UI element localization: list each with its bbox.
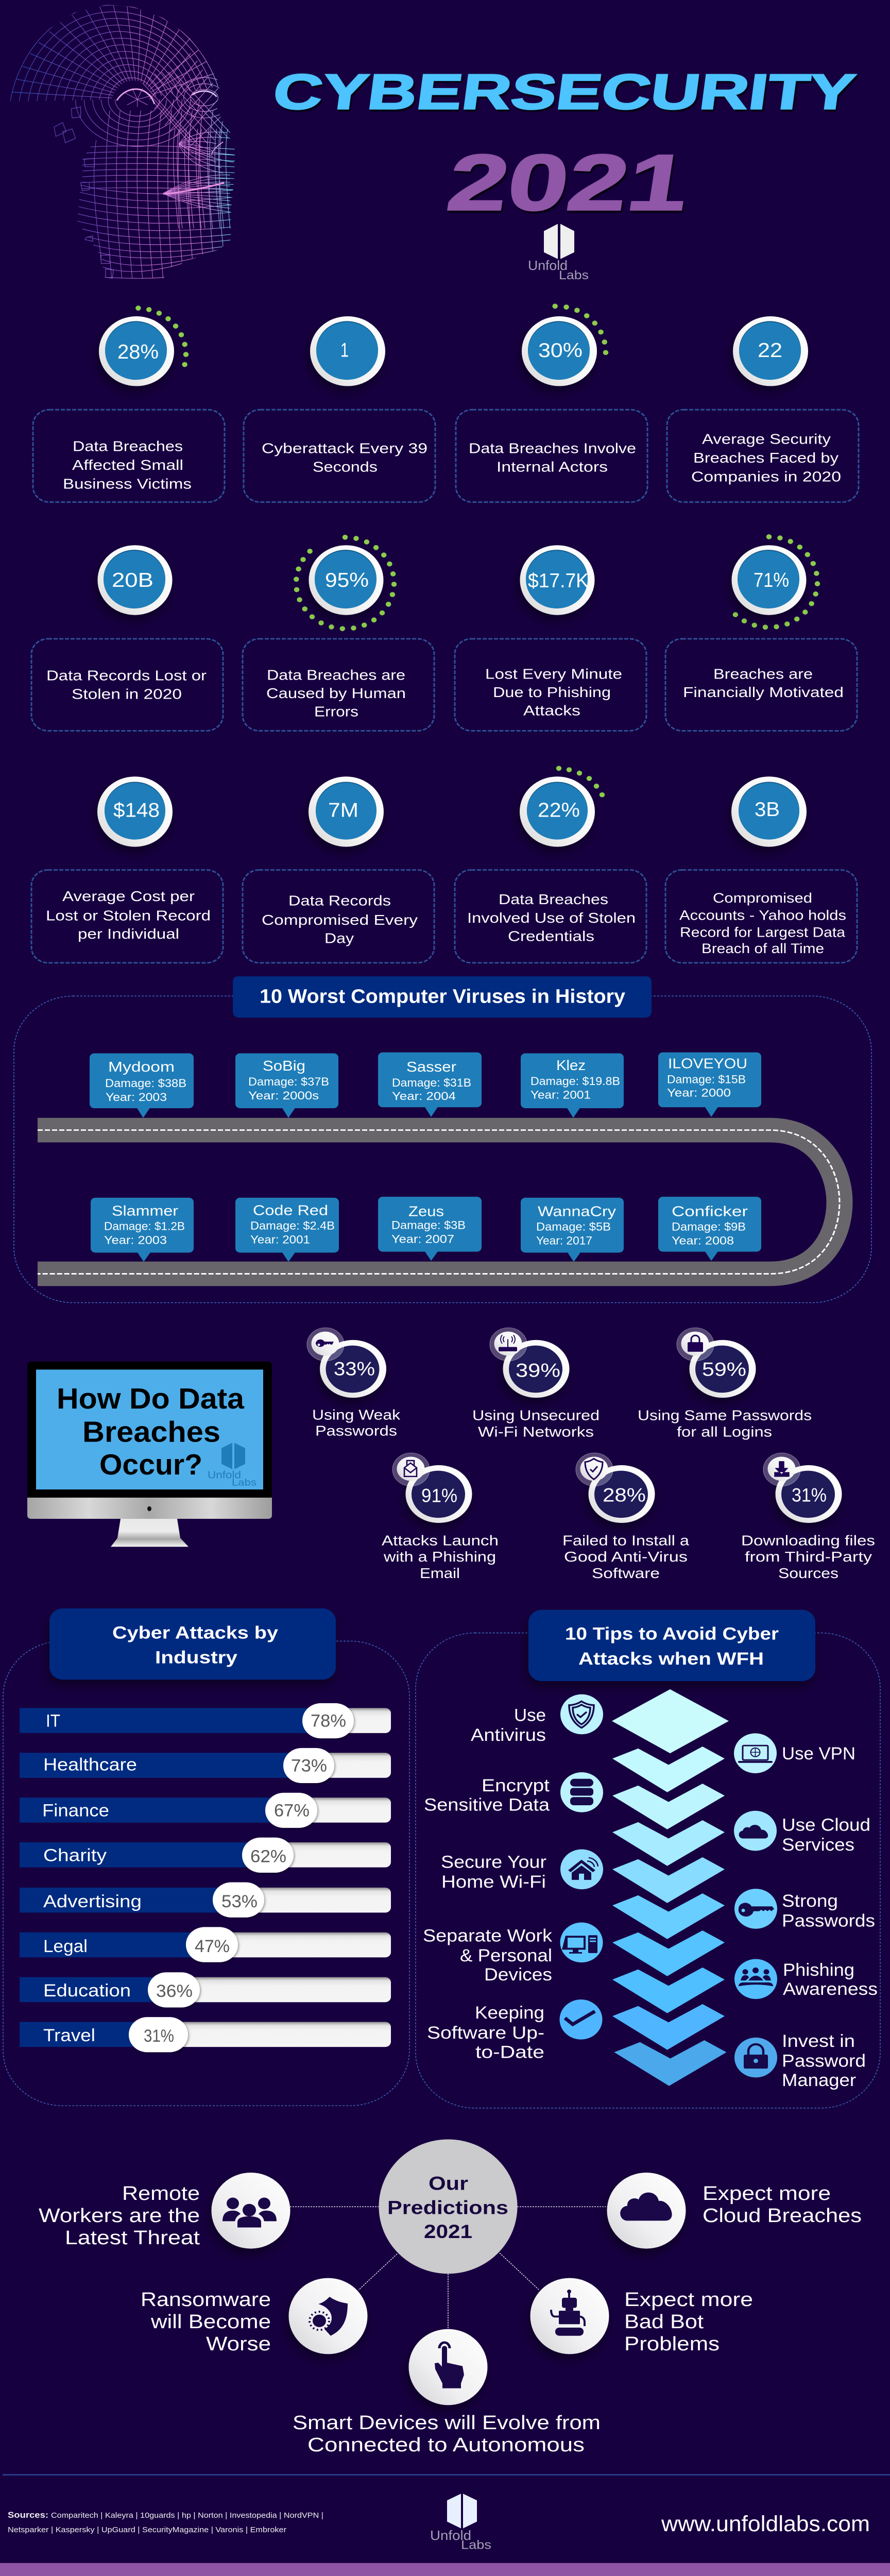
callout: Sasser: Damage: $31B (392, 1076, 471, 1089)
stacked arrow layers (612, 1689, 729, 2086)
callout: Code Red: Code Red (253, 1202, 328, 1218)
card: average breaches: Companies in 2020 (691, 469, 841, 485)
prediction: remote workers (39, 2173, 290, 2249)
bar: Advertising 53% (20, 1883, 391, 1918)
footer: sources: Comparitech | Kaleyra | 10guards | hp | Norton | Investopedia | NordVPN | (51, 2511, 323, 2520)
tip: secure home wifi: Secure Your (441, 1852, 546, 1872)
bar: Travel 31% (20, 2017, 391, 2052)
stat: phishing email: Email (420, 1566, 460, 1582)
callout: Code Red (235, 1198, 339, 1262)
callout: Sasser: Sasser (406, 1059, 456, 1075)
bar: Advertising 53%: 53% (221, 1891, 258, 1911)
card: human errors: Data Breaches are (267, 667, 405, 683)
callout: ILOVEYOU: Damage: $15B (667, 1073, 746, 1086)
icon: cloud (739, 1825, 768, 1838)
stat: anti-virus: Good Anti-Virus (564, 1549, 688, 1565)
icon: lock (688, 1335, 703, 1352)
icon: team (739, 1968, 773, 1986)
callout: Sasser: Year: 2004 (392, 1090, 456, 1103)
monitor: how do data breaches occur: How Do Data (57, 1382, 245, 1415)
icon: router (499, 1335, 517, 1351)
heading: 10 worst viruses: 10 Worst Computer Viruses in History (260, 986, 625, 1007)
card: records lost (31, 639, 223, 731)
stat: anti-virus (562, 1453, 690, 1582)
tip: keep software updated (427, 1999, 603, 2062)
tip: encrypt sensitive data: Sensitive Data (424, 1794, 550, 1815)
card: every 39 seconds (244, 410, 435, 502)
card: yahoo record: Record for Largest Data (680, 924, 845, 940)
icon: shield virus (310, 2297, 348, 2336)
heading: 10 tips (528, 1610, 815, 1681)
bar: Education 36% (20, 1972, 391, 2007)
callout: SoBig: Damage: $37B (248, 1075, 329, 1088)
card: every 39 seconds: Cyberattack Every 39 (262, 440, 427, 456)
bar: IT 78%: 78% (311, 1711, 346, 1731)
icon: download (775, 1462, 789, 1477)
card: small business victims: Affected Small (72, 457, 183, 473)
stat: unsecured wifi: Wi-Fi Networks (478, 1424, 594, 1440)
tip: use antivirus: Antivirus (471, 1725, 546, 1745)
panel: 10 tips (416, 1610, 880, 2108)
callout: Zeus: Year: 2007 (391, 1232, 454, 1245)
callout: Mydoom: Mydoom (108, 1059, 175, 1075)
footer: sources: Netsparker | Kaspersky | UpGuard | SecurityMagazine | Varonis | Embroker (8, 2526, 286, 2534)
card: records lost: Stolen in 2020 (72, 687, 182, 703)
callout: WannaCry: Year: 2017 (536, 1234, 592, 1247)
tip: password manager (734, 2031, 866, 2090)
tip: phishing awareness: Phishing (783, 1960, 854, 1980)
title: 2021: 2021 (442, 139, 695, 227)
stat: phishing email (382, 1453, 499, 1582)
bar: IT 78%: IT (46, 1711, 60, 1731)
website url: www.unfoldlabs.com (661, 2512, 870, 2536)
logo: Unfold Labs monitor: Labs (232, 1477, 256, 1488)
icon: home wifi (568, 1858, 598, 1880)
card: records lost: Data Records Lost or (46, 668, 207, 684)
icon: people (222, 2198, 277, 2227)
callout: ILOVEYOU: Year: 2000 (667, 1086, 731, 1099)
stat: 20B (98, 545, 172, 615)
card: records compromised (243, 870, 434, 963)
icon: check (565, 2011, 595, 2024)
card: human errors: Errors (314, 704, 358, 720)
heading: 10 tips: 10 Tips to Avoid Cyber (565, 1624, 779, 1643)
monitor: how do data breaches occur: Occur? (99, 1448, 202, 1481)
prediction: smart devices: Connected to Autonomous (307, 2434, 585, 2456)
callout: Conficker: Damage: $9B (672, 1220, 746, 1233)
stat: $148 (97, 776, 173, 847)
stat: $17.7K: $17.7K (528, 569, 589, 592)
card: average breaches: Breaches Faced by (693, 450, 839, 466)
stat: 28%: 28% (117, 340, 159, 363)
logo: Unfold Labs footer (430, 2494, 491, 2552)
callout: Klez: Year: 2001 (530, 1088, 591, 1101)
card: stolen credentials (455, 870, 646, 963)
tip: separate devices: Devices (484, 1964, 552, 1985)
prediction: smart devices (293, 2329, 601, 2456)
stat: 3B: 3B (755, 798, 780, 821)
card: internal actors: Data Breaches Involve (469, 440, 636, 456)
card: small business victims: Data Breaches (73, 438, 183, 454)
card: financially motivated: Breaches are (713, 666, 813, 682)
callout: WannaCry (521, 1198, 624, 1262)
prediction: cloud breaches: Expect more (703, 2182, 831, 2205)
callout: SoBig: Year: 2000s (248, 1089, 319, 1102)
monitor: how do data breaches occur (27, 1361, 272, 1547)
panel: cyber attacks by industry (3, 1608, 409, 2106)
card: average breaches: Average Security (702, 431, 831, 447)
callout: Zeus: Damage: $3B (391, 1218, 466, 1231)
callout: Slammer (91, 1198, 194, 1262)
logo: Unfold Labs top: Labs (559, 268, 589, 282)
tip: password manager: Password (782, 2051, 866, 2071)
callout: Zeus: Zeus (408, 1204, 444, 1219)
prediction: ransomware: Ransomware (141, 2289, 271, 2310)
stat: 22% (520, 766, 605, 847)
prediction: bad bots: Bad Bot (624, 2311, 704, 2332)
bar: Charity 62%: Charity (43, 1845, 107, 1865)
icon: computer (562, 1935, 597, 1954)
card: average cost: Average Cost per (62, 889, 195, 905)
tip: phishing awareness: Awareness (783, 1979, 878, 1999)
callout: Mydoom: Year: 2003 (106, 1091, 167, 1104)
icon: key (739, 1903, 774, 1917)
card: internal actors (456, 410, 647, 502)
bar: Travel 31%: Travel (43, 2025, 95, 2045)
bar: Travel 31%: 31% (144, 2026, 174, 2046)
tip: use antivirus: Use (514, 1705, 546, 1725)
card: small business victims: Business Victims (63, 476, 192, 492)
bar: Healthcare 73%: Healthcare (43, 1755, 137, 1774)
stat: weak passwords (307, 1328, 401, 1439)
stat: anti-virus: 28% (603, 1485, 646, 1506)
prediction: smart devices: Smart Devices will Evolve from (293, 2412, 601, 2434)
center: our predictions 2021: Our (429, 2173, 468, 2194)
stat: unsecured wifi (472, 1328, 600, 1440)
stat: anti-virus: Software (592, 1566, 660, 1582)
prediction: cloud breaches: Cloud Breaches (703, 2205, 862, 2227)
stat: unsecured wifi: Using Unsecured (472, 1408, 600, 1423)
card: yahoo record (665, 870, 857, 963)
stat: 30%: 30% (538, 338, 583, 362)
stat: weak passwords: Passwords (315, 1423, 397, 1439)
card: average cost: Lost or Stolen Record (46, 908, 211, 924)
prediction: bad bots: Problems (624, 2333, 720, 2354)
stat: 95% (296, 537, 394, 629)
tip: secure home wifi: Home Wi-Fi (441, 1872, 546, 1892)
card: human errors: Caused by Human (266, 686, 406, 702)
prediction: bad bots (530, 2278, 753, 2354)
road (38, 1130, 840, 1274)
heading: cyber attacks by industry: Cyber Attacks by (112, 1623, 278, 1642)
bar: Education 36%: 36% (156, 1981, 193, 2001)
logo: Unfold Labs monitor: Unfold (208, 1469, 241, 1481)
logo: Unfold Labs monitor (208, 1443, 256, 1488)
stat: 22 (733, 316, 808, 386)
prediction: cloud breaches (607, 2173, 862, 2249)
logo: Unfold Labs top (528, 224, 589, 282)
stat: 7M (309, 776, 384, 847)
icon: database (570, 1779, 593, 1805)
icon: mail (404, 1461, 417, 1477)
stat: 1: 1 (340, 338, 349, 361)
callout: Conficker (658, 1197, 761, 1261)
bar: Legal 47%: 47% (195, 1936, 230, 1956)
card: records compromised: Day (324, 930, 354, 946)
card: stolen credentials: Data Breaches (499, 892, 608, 908)
tip: encrypt sensitive data (424, 1772, 603, 1815)
card: lost every minute (455, 639, 646, 731)
panel: worst viruses (14, 976, 871, 1302)
icon: padlock (744, 2044, 768, 2069)
callout: Slammer: Year: 2003 (104, 1233, 167, 1246)
stat: third-party downloads: from Third-Party (745, 1549, 872, 1565)
center: our predictions 2021: 2021 (424, 2221, 472, 2243)
card: yahoo record: Compromised (713, 890, 812, 906)
callout: Klez: Klez (556, 1058, 586, 1074)
tip: password manager: Manager (782, 2070, 856, 2090)
callout: Klez (521, 1053, 624, 1118)
card: records compromised: Compromised Every (262, 912, 418, 928)
callout: Zeus (378, 1197, 482, 1261)
tip: separate devices: Separate Work (423, 1926, 552, 1945)
icon: key (316, 1340, 334, 1347)
bar: Legal 47%: Legal (43, 1936, 88, 1956)
stat: 28% (99, 308, 187, 386)
stat: unsecured wifi: 39% (516, 1360, 560, 1381)
card: stolen credentials: Credentials (508, 929, 594, 945)
icon: shield (585, 1459, 603, 1479)
footer bar (0, 2563, 890, 2576)
card: small business victims (33, 410, 225, 502)
card: lost every minute: Attacks (523, 703, 580, 719)
tip: phishing awareness (734, 1959, 878, 1999)
stat: 1 (310, 316, 385, 386)
footer: sources: Sources: (8, 2510, 48, 2520)
prediction: ransomware: will Become (150, 2311, 271, 2332)
center: our predictions 2021 (379, 2139, 517, 2274)
tip: use cloud services (734, 1811, 870, 1855)
tip: encrypt sensitive data: Encrypt (482, 1775, 550, 1795)
footer: sources (8, 2510, 323, 2534)
card: stolen credentials: Involved Use of Stolen (467, 910, 636, 926)
card: internal actors: Internal Actors (497, 460, 608, 475)
bar: Healthcare 73% (20, 1748, 391, 1783)
callout: SoBig (235, 1053, 338, 1118)
callout: WannaCry: Damage: $5B (536, 1220, 611, 1233)
stat: weak passwords: 33% (334, 1359, 375, 1380)
tip: keep software updated: Software Up- (427, 2023, 544, 2043)
stat: 71%: 71% (754, 568, 789, 591)
stat: phishing email: Attacks Launch (382, 1533, 499, 1549)
stat: $148: $148 (113, 799, 160, 821)
icon: wireframe face (10, 5, 235, 278)
stat: same passwords (638, 1328, 812, 1440)
stat: third-party downloads (741, 1453, 875, 1582)
stat: 22: 22 (758, 338, 782, 362)
stat: 3B (731, 776, 807, 847)
card: yahoo record: Accounts - Yahoo holds (679, 908, 846, 923)
prediction: bad bots: Expect more (624, 2289, 753, 2310)
tip: use VPN: Use VPN (782, 1743, 855, 1764)
card: financially motivated (665, 639, 857, 731)
tip: separate devices (423, 1923, 603, 1985)
callout: ILOVEYOU: ILOVEYOU (668, 1056, 747, 1072)
callout: Klez: Damage: $19.8B (530, 1075, 620, 1088)
card: average cost: per Individual (78, 926, 179, 942)
callout: SoBig: SoBig (263, 1058, 305, 1074)
bar: Legal 47% (20, 1927, 391, 1962)
prediction: remote workers: Remote (122, 2182, 200, 2205)
stat: same passwords: for all Logins (677, 1424, 772, 1440)
card: records compromised: Data Records (288, 893, 391, 909)
stat: same passwords: 59% (702, 1359, 746, 1380)
icon: laptop globe (738, 1745, 773, 1763)
icon: robot (551, 2290, 585, 2336)
callout: Code Red: Year: 2001 (250, 1233, 310, 1246)
card: every 39 seconds: Seconds (313, 460, 378, 475)
tip: strong passwords: Strong (782, 1891, 838, 1911)
heading: cyber attacks by industry: Industry (155, 1647, 237, 1667)
card: yahoo record: Breach of all Time (701, 941, 824, 956)
tip: password manager: Invest in (782, 2031, 855, 2051)
tip: secure home wifi (441, 1850, 603, 1892)
callout: ILOVEYOU (658, 1053, 761, 1117)
card: lost every minute: Lost Every Minute (485, 666, 622, 682)
diagram: our predictions (39, 2139, 862, 2456)
callout: Slammer: Slammer (112, 1203, 178, 1219)
stat: weak passwords: Using Weak (312, 1407, 401, 1423)
heading: cyber attacks by industry (49, 1608, 336, 1680)
tip: separate devices: & Personal (460, 1945, 552, 1965)
callout: Mydoom: Damage: $38B (105, 1077, 186, 1090)
heading: 10 tips: Attacks when WFH (578, 1649, 764, 1669)
card: human errors (243, 639, 434, 731)
callout: Sasser (378, 1053, 482, 1117)
bar: Education 36%: Education (43, 1980, 131, 2001)
stat: phishing email: with a Phishing (383, 1549, 496, 1565)
tip: strong passwords (734, 1889, 875, 1930)
callout: Code Red: Damage: $2.4B (250, 1219, 335, 1232)
prediction: ransomware: Worse (206, 2333, 271, 2354)
callout: Slammer: Damage: $1.2B (104, 1219, 185, 1232)
prediction: remote workers: Workers are the (39, 2205, 200, 2227)
bar: Healthcare 73%: 73% (291, 1756, 327, 1775)
stat: same passwords: Using Same Passwords (638, 1408, 812, 1423)
stat: 71% (728, 537, 817, 628)
card: financially motivated: Financially Motivated (683, 685, 844, 701)
prediction: ransomware (141, 2278, 368, 2354)
stat: third-party downloads: Downloading files (741, 1533, 875, 1549)
tip: use cloud services: Services (782, 1835, 854, 1855)
callout: Mydoom (90, 1053, 194, 1118)
stat: third-party downloads: 31% (792, 1485, 827, 1506)
logo: Unfold Labs top: Unfold (528, 258, 568, 273)
stat: third-party downloads: Sources (778, 1566, 838, 1582)
icon: cloud (620, 2193, 672, 2221)
center: our predictions 2021: Predictions (387, 2197, 508, 2218)
logo: Unfold Labs footer: Unfold (430, 2528, 471, 2543)
bar: IT 78% (20, 1703, 391, 1738)
bar: Charity 62% (20, 1838, 391, 1873)
monitor: how do data breaches occur: Breaches (82, 1415, 220, 1448)
title: CYBERSECURITY: CYBERSECURITY (270, 64, 858, 120)
card: average breaches (667, 410, 859, 502)
bar: Finance 67%: 67% (274, 1801, 310, 1820)
card: lost every minute: Due to Phishing (493, 685, 611, 701)
stat: anti-virus: Failed to Install a (562, 1533, 690, 1549)
stat: 20B: 20B (112, 568, 153, 591)
tip: keep software updated: to-Date (475, 2042, 544, 2062)
tip: use antivirus (471, 1694, 603, 1745)
callout: Conficker: Conficker (672, 1204, 748, 1219)
heading: 10 worst viruses (233, 976, 652, 1018)
tip: keep software updated: Keeping (475, 2003, 544, 2023)
card: average cost (31, 870, 223, 963)
stat: 22%: 22% (538, 799, 580, 821)
icon: shield check (569, 1701, 594, 1728)
logo: Unfold Labs footer: Labs (461, 2538, 491, 2552)
callout: Conficker: Year: 2008 (672, 1234, 734, 1247)
prediction: remote workers: Latest Threat (65, 2227, 200, 2249)
icon: pointing hand (435, 2343, 464, 2388)
stat: $17.7K (520, 545, 594, 615)
stat: 7M: 7M (328, 799, 358, 821)
stat: 30% (522, 304, 606, 386)
tip: strong passwords: Passwords (782, 1911, 875, 1930)
tip: use VPN (734, 1733, 855, 1773)
callout: WannaCry: WannaCry (538, 1204, 617, 1219)
bar: Finance 67%: Finance (42, 1801, 109, 1820)
bar: Charity 62%: 62% (250, 1846, 286, 1866)
bar: Finance 67% (20, 1793, 391, 1828)
stat: 95%: 95% (325, 568, 369, 591)
stat: phishing email: 91% (421, 1485, 457, 1506)
tip: use cloud services: Use Cloud (782, 1815, 870, 1835)
bar: Advertising 53%: Advertising (43, 1891, 142, 1911)
